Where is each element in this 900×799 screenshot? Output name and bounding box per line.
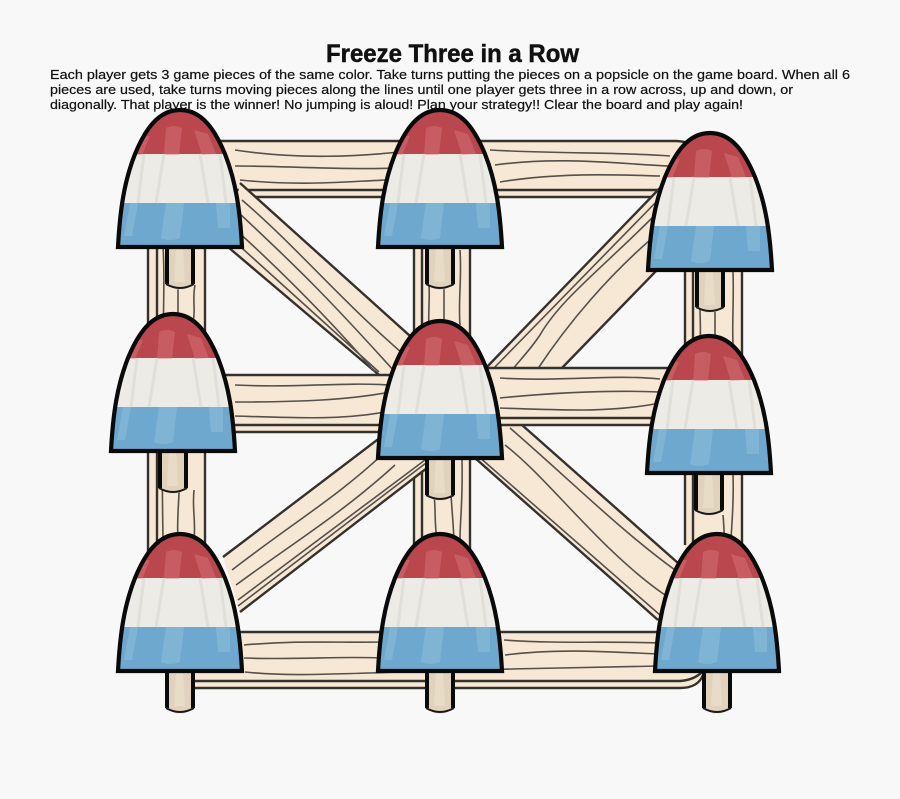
vertical stick: left: [148, 197, 205, 640]
diagonal stick: upper right: [480, 188, 660, 374]
popsicle pieces: [103, 108, 787, 713]
horizontal stick: top: [190, 141, 700, 197]
title: Freeze Three in a Row: [326, 40, 580, 68]
game board: popsicle sticks: [148, 141, 742, 688]
popsicle: bottom left: [110, 532, 250, 713]
popsicle: top left: [110, 108, 250, 289]
diagonal stick: lower left: [223, 434, 427, 612]
diagonal stick: lower right: [465, 414, 678, 620]
horizontal stick: middle right: [480, 368, 680, 425]
diagonal stick: upper left: [228, 183, 450, 380]
instructions text: pieces are used, take turns moving pieces along the lines until one player gets three in a row across, up and down, or: [50, 82, 794, 97]
popsicle: bottom center: [370, 532, 510, 713]
instructions text: [50, 67, 850, 112]
horizontal stick: middle left: [225, 375, 400, 432]
popsicle: bottom right: [647, 532, 787, 713]
vertical stick: center: [414, 197, 470, 640]
popsicle: center: [370, 319, 510, 500]
horizontal stick: bottom: [190, 632, 704, 688]
instructions text: Each player gets 3 game pieces of the same color. Take turns putting the pieces on a popsicle on the game board. When all 6: [50, 67, 850, 82]
popsicle: top right: [640, 131, 780, 312]
instructions text: diagonally. That player is the winner! No jumping is aloud! Plan your strategy!! Clear the board and play again!: [50, 97, 743, 112]
game board infographic: [50, 44, 850, 714]
popsicle: middle left: [103, 312, 243, 493]
popsicle: top center: [370, 108, 510, 289]
popsicle: middle right: [639, 334, 779, 515]
vertical stick: right: [685, 265, 742, 560]
